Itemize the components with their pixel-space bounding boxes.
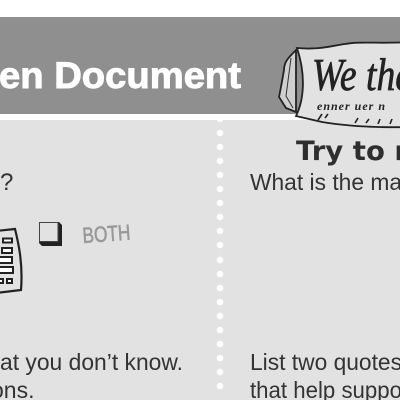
text block: left prompt [0, 349, 183, 400]
text block: left prompt: at you don’t know. [0, 349, 183, 375]
icon: constitution scroll: enner uer n [317, 99, 386, 113]
header banner [0, 17, 400, 114]
text block: list quotes: List two quotes [250, 349, 400, 375]
title: en Document [0, 55, 241, 96]
text block: list quotes [250, 349, 400, 400]
icon: checkbox [39, 222, 62, 246]
handwritten label: both: BOTH [82, 220, 131, 248]
dotted column divider [217, 116, 223, 389]
panel: body background [0, 120, 400, 400]
text block: main idea question: What is the ma [250, 169, 400, 195]
icon: calculator [0, 229, 22, 293]
icon: constitution scroll [279, 42, 400, 127]
question mark text: ? [0, 169, 13, 196]
